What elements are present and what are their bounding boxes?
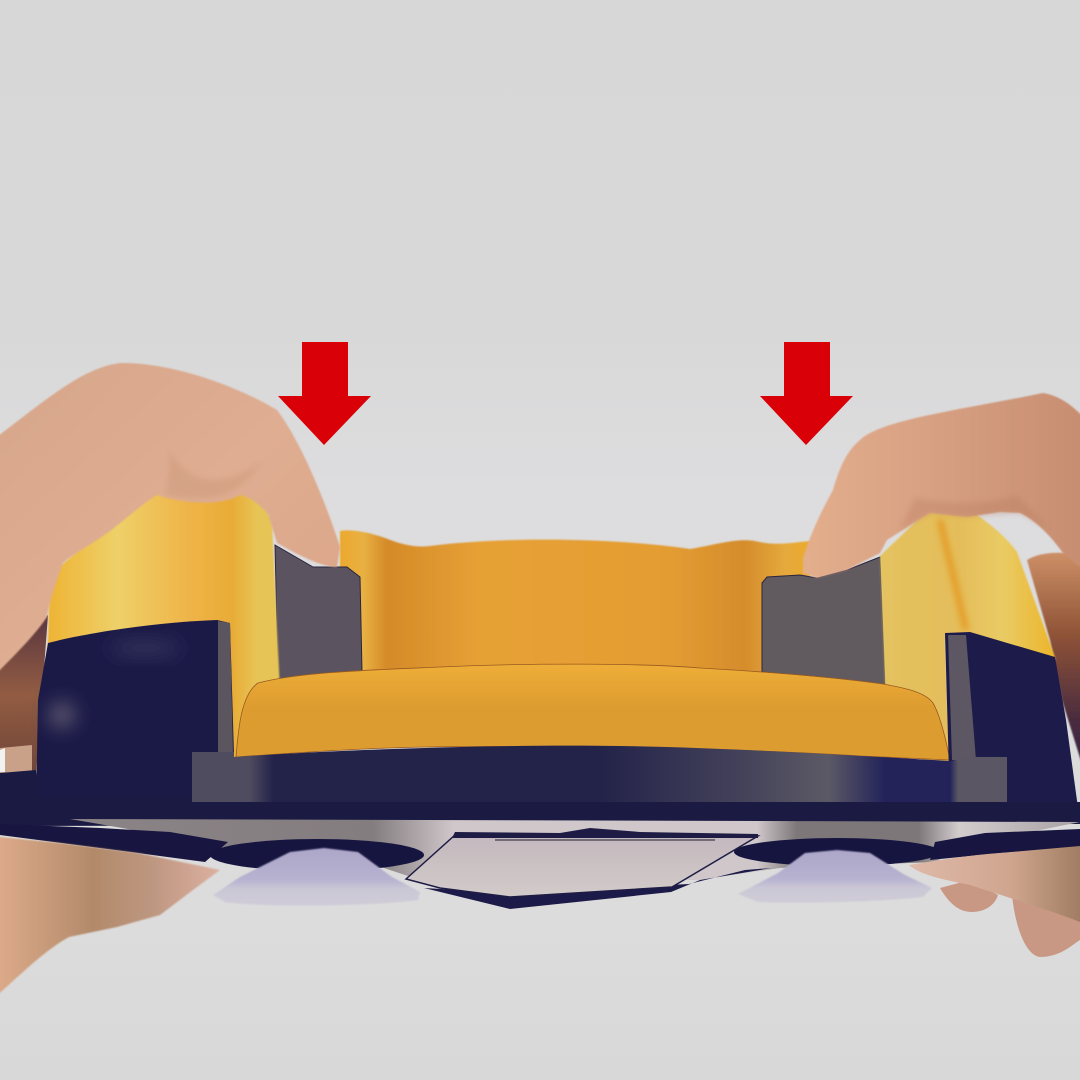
right navy block <box>945 632 1078 808</box>
right red arrow <box>760 342 853 445</box>
left suction cup <box>213 848 420 906</box>
underside grey plate <box>70 819 1080 880</box>
left dark window <box>275 545 362 680</box>
right upper hand <box>803 393 1080 578</box>
small product mark <box>495 839 715 841</box>
center panel <box>406 828 772 909</box>
lower palm <box>909 846 1080 922</box>
left upper hand <box>0 363 340 680</box>
underside left dark wedge <box>0 824 228 862</box>
right lower hand <box>909 846 1080 957</box>
base plate <box>0 770 1080 826</box>
left back hand shadow <box>0 615 48 776</box>
underside right dark wedge <box>930 829 1080 860</box>
left red arrow <box>278 342 371 445</box>
back yellow panel <box>340 530 810 680</box>
left navy block <box>36 620 234 808</box>
left lower hand <box>0 836 220 1002</box>
base band <box>192 746 1007 806</box>
right dark suction ring <box>734 838 940 866</box>
device body <box>0 486 1080 909</box>
right suction cup <box>738 850 932 903</box>
right yellow wing <box>880 508 1056 765</box>
right back finger <box>1027 553 1080 790</box>
left yellow wing <box>40 486 280 770</box>
front yellow lip <box>236 664 950 760</box>
right dark window <box>762 557 885 685</box>
lower fingers <box>940 880 1080 957</box>
left dark suction ring <box>210 839 424 871</box>
